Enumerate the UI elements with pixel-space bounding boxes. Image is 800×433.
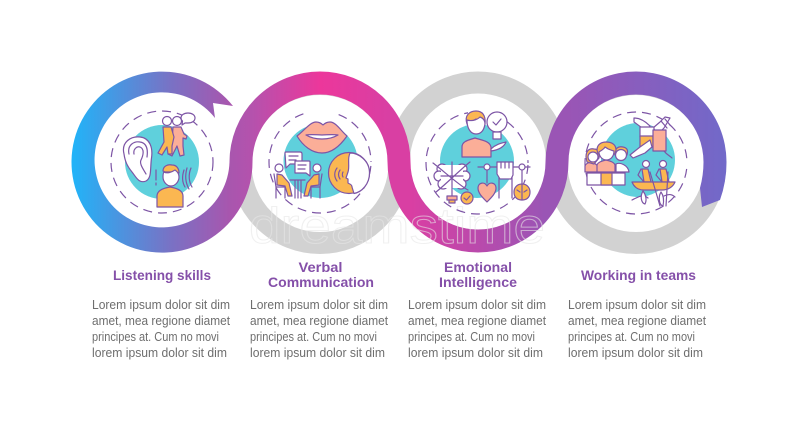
heading: Working in teams: Working in teams	[581, 267, 696, 283]
text block 1: Lorem ipsum dolor sit dim	[92, 298, 230, 312]
text block 3	[408, 298, 546, 360]
brain and atom	[433, 162, 473, 204]
text block 4: amet, mea regione diamet	[568, 314, 706, 328]
text block 3: principes at. Cum no movi	[408, 330, 535, 344]
icon: emotional intelligence	[426, 104, 530, 214]
man with lightbulb	[462, 111, 507, 157]
heading: Emotional Intelligence: Emotional	[444, 259, 512, 275]
rowing boat	[632, 160, 675, 206]
text block 1: principes at. Cum no movi	[92, 330, 219, 344]
heading: Verbal Communication	[268, 259, 374, 290]
text block 3: lorem ipsum dolor sit dim	[408, 346, 543, 360]
text block 1: amet, mea regione diamet	[92, 314, 230, 328]
heading: Emotional Intelligence	[439, 259, 517, 290]
heading: Listening skills: Listening skills	[113, 267, 211, 283]
text block 2: principes at. Cum no movi	[250, 330, 377, 344]
text block 4: lorem ipsum dolor sit dim	[568, 346, 703, 360]
walking people	[158, 113, 195, 156]
text block 2	[250, 298, 388, 360]
text block 2: lorem ipsum dolor sit dim	[250, 346, 385, 360]
text block 3: amet, mea regione diamet	[408, 314, 546, 328]
man with sound	[156, 165, 192, 207]
watermark: dreamstime	[249, 198, 545, 254]
lips	[297, 122, 347, 153]
three people with puzzle	[585, 142, 629, 185]
icon: working in teams	[585, 112, 687, 214]
heading: Emotional Intelligence: Intelligence	[439, 274, 517, 290]
chat bubbles and table	[274, 152, 322, 198]
heading: Verbal Communication: Communication	[268, 274, 374, 290]
text block 2: Lorem ipsum dolor sit dim	[250, 298, 388, 312]
hands and puzzle	[630, 117, 672, 158]
text block 1: lorem ipsum dolor sit dim	[92, 346, 227, 360]
scale with heart, fist and brain	[478, 162, 530, 202]
icon: verbal communication	[269, 105, 371, 213]
text block 2: amet, mea regione diamet	[250, 314, 388, 328]
text block 4	[568, 298, 706, 360]
heading: Verbal Communication: Verbal	[298, 259, 342, 275]
speaking face	[328, 152, 370, 194]
text block 3: Lorem ipsum dolor sit dim	[408, 298, 546, 312]
text block 4: principes at. Cum no movi	[568, 330, 695, 344]
coloured ribbon	[72, 72, 727, 253]
text block 4: Lorem ipsum dolor sit dim	[568, 298, 706, 312]
grey ribbon rings	[240, 82, 716, 243]
text block 1	[92, 298, 230, 360]
ear	[123, 137, 152, 182]
icon: listening skills	[111, 111, 213, 213]
